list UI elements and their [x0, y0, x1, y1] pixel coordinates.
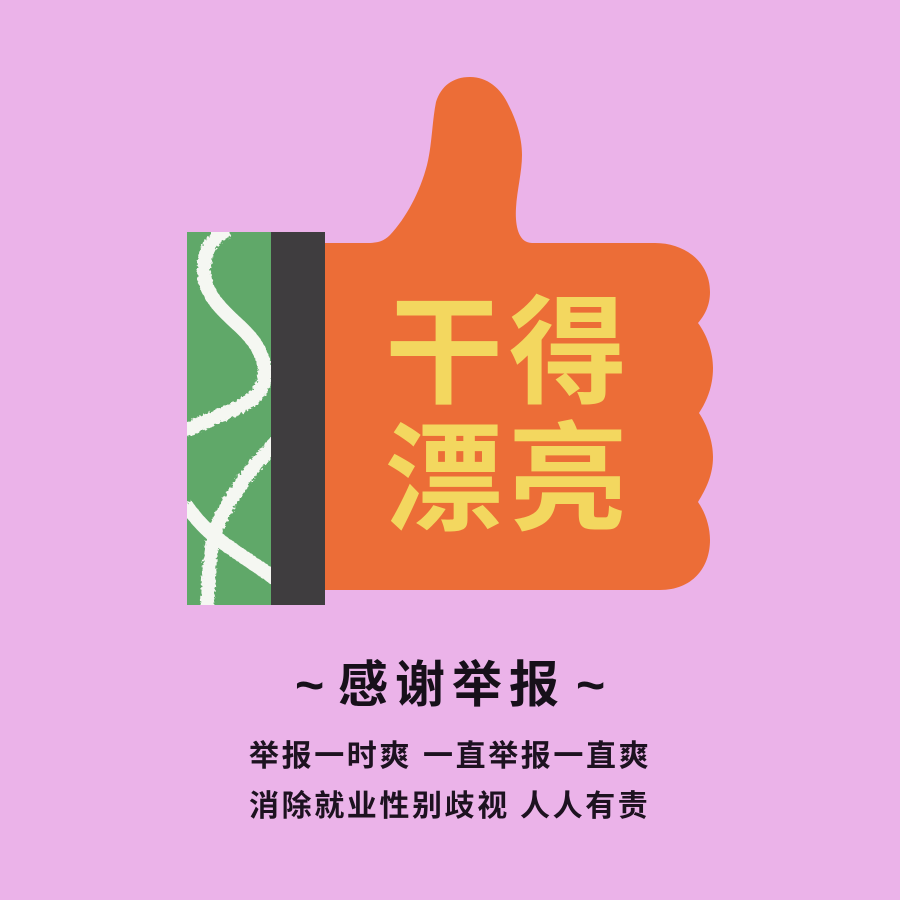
text block: line one: 一直举报一直爽	[423, 740, 651, 773]
heading: thanks for reporting: ~	[295, 657, 324, 713]
heading: thanks for reporting: 感谢举报	[338, 657, 566, 713]
icon: green cuff	[187, 232, 271, 605]
heading: thanks for reporting: ~	[576, 657, 605, 713]
title: 干得: 干得	[385, 288, 633, 420]
illustration: thumbs up with captions	[187, 77, 713, 819]
text block: line two: 人人有责	[520, 790, 650, 823]
text block: line two: 消除就业性别歧视	[249, 790, 510, 823]
icon: orange hand	[325, 77, 713, 590]
icon: white chalk squiggle pattern	[187, 232, 271, 605]
icon: dark cuff band	[271, 232, 325, 605]
text block: line one: 举报一时爽	[249, 740, 412, 773]
title: 漂亮: 漂亮	[385, 415, 633, 547]
